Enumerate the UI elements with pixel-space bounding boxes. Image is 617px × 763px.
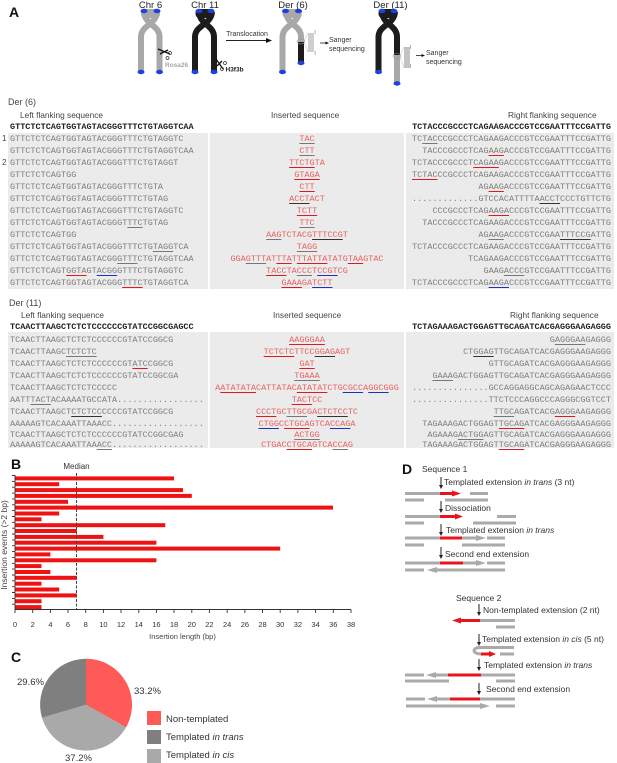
sequences: Der (6) right flanking: TCTACCCGCCCTCAGAAGACCCGTCCGAATTTCCGATTG [412, 158, 611, 168]
sequences: Der (6) inserted [230, 134, 384, 288]
column heading: inserted sequence: Inserted sequence [273, 310, 341, 320]
panel: Der (11) inserts [210, 332, 404, 448]
chromosome: Der (11) [373, 0, 411, 86]
sequences: Der (11) inserted [215, 334, 399, 450]
sequences: Der (6) left flanking: GTTCTCTCAGTGGTAGTACGGGTTTCTGTAG [10, 218, 168, 228]
chromosome: Der (6): Der (6) [278, 0, 308, 11]
sequences: Der (11) left flanking: TCAACTTAAGCTCTCTC [10, 346, 97, 356]
x axis tick labels: 36 [329, 620, 337, 629]
sequence 2 model: Second end extension [486, 684, 570, 694]
sequences: Der (11) left flanking: AAAAAGTCACAAATTAAACC.................. [10, 440, 204, 450]
sequences: Der (11) inserted: TGAAA [294, 370, 320, 380]
sequences: Der (6) right flanking: TACCCGCCCTCAGAAGACCCGTCCGAATTTCCGATTG [422, 146, 611, 156]
panel letter A: A [9, 4, 19, 20]
x axis tick labels: 22 [205, 620, 214, 629]
x axis tick labels: 8 [84, 620, 88, 629]
x axis tick labels: 16 [152, 620, 161, 629]
sequences: Der (11) right flanking: ...............GCCAGGAGGCAGCAGAGAACTCCC [412, 382, 611, 392]
sequence 1 model: Templated extension in trans (3 nt) [444, 477, 575, 487]
reference sequence: left: GTTCTCTCAGTGGTAGTACGGGTTTCTGTAGGTCAA [10, 122, 194, 132]
arrow: translocation: Translocation [226, 31, 268, 38]
sequences: Der (11) right flanking: GAGGGAAGAGGG [550, 334, 611, 344]
chromosome: Der (6): l [314, 30, 316, 36]
legend: Templated in cis [166, 750, 234, 761]
sequences: Der (6) inserted: GAAAGATCTT [281, 278, 332, 288]
heading: Der (6): Der (6) [8, 97, 36, 107]
panel B: insertion length bar chart [0, 456, 355, 641]
sequences: Der (11) left flanking: AAAAAGTCACAAATTAAACC.................. [10, 418, 204, 428]
legend [147, 711, 244, 763]
pie slices [40, 659, 132, 751]
panel letter B: B [11, 456, 21, 472]
sequence 2 model: Templated extension in cis (5 nt) [482, 634, 604, 644]
column heading: left flanking sequence: Left flanking sequence [20, 110, 103, 120]
sequence 1 model: Sequence 1 [422, 464, 468, 474]
panel: Der (6) left flanks [8, 133, 208, 289]
sequences: Der (11) right flanking: TAGAAAGACTGGAGTTGCAGATCACGAGGGAAGAGGG [422, 440, 611, 450]
sequences: Der (6) left flanking: GTTCTCTCAGTGGTAGTACGGGTTTCTGTAGGT [10, 158, 178, 168]
x axis tick labels: 26 [241, 620, 249, 629]
panel letter D: D [402, 461, 412, 477]
sequences: Der (6) left flanking [10, 134, 194, 288]
sequences: Der (6) inserted: TAGG [297, 242, 317, 252]
sequences: Der (6) right flanking: TCTACCCGCCCTCAGAAGACCCGTCCGAATTTCCGATTG [412, 170, 611, 180]
pie value labels: 33.2% [134, 686, 161, 697]
x axis tick labels: 38 [347, 620, 355, 629]
sequences: Der (6) inserted: TTCTGTA [289, 158, 325, 168]
sequences: Der (6) left flanking: GTTCTCTCAGTGGTAGTACGGGTTTCTGTAGGTC [10, 206, 183, 216]
x axis tick labels: 4 [48, 620, 52, 629]
heading: Der (11): Der (11) [9, 298, 41, 308]
sequence 2 model: Non-templated extension (2 nt) [483, 605, 600, 615]
callout: Sanger sequencing (Der 11) [416, 50, 462, 66]
x axis tick labels: 0 [13, 620, 17, 629]
sequences: Der (11) left flanking: TCAACTTAAGCTCTCTCCCCCCGTATCCGGCGA [10, 370, 178, 380]
callout: Sanger sequencing (Der 6): Sanger [329, 37, 352, 44]
sequences: Der (6) right flanking: TACCCGCCCTCAGAAGACCCGTCCGAATTTCCGATTG [422, 218, 611, 228]
x axis tick labels: 30 [276, 620, 284, 629]
pie value labels [17, 677, 161, 763]
sequence 1 model: Dissociation [445, 503, 491, 513]
column heading: inserted sequence: Inserted sequence [271, 110, 339, 120]
row number 2: 2 [2, 157, 7, 167]
sequences: Der (11) right flanking: TTGCAGATCACGAGGGAAGAGGG [494, 406, 611, 416]
chromosome: Chr 6: Chr 6 [139, 0, 162, 11]
panel A: chromosome translocation schematic [9, 0, 462, 86]
sequences: Der (6) inserted: TTC [299, 218, 315, 228]
sequences: Der (11) right flanking: ...............TTCTCCCAGGCCCAGGGCGGTCCT [412, 394, 611, 404]
x axis tick labels: 12 [117, 620, 125, 629]
chromosome: Chr 6: Rosa26 [165, 62, 189, 69]
chromosome: Chr 11 [191, 0, 244, 74]
sequences: Der (11) right flanking: TAGAAAGACTGGAGTTGCAGATCACGAGGGAAGAGGG [422, 418, 611, 428]
sequences: Der (11) inserted: TACTCC [292, 394, 322, 404]
sequences: Der (11) inserted: TCTCTCTTCCGGAGAGT [264, 346, 350, 356]
sequences: Der (6) right flanking: GAAGACCCGTCCGAATTTCCGATTG [483, 266, 611, 276]
median label: Median [63, 462, 90, 471]
panel: Der (11) left flanks [8, 332, 208, 448]
sequences: Der (11) left flanking: TCAACTTAAGCTCTCTCCCCCCGTATCCGGCG [10, 406, 173, 416]
sequences: Der (11) inserted: GAT [299, 358, 315, 368]
bars [15, 476, 333, 609]
row number 1: 1 [2, 133, 7, 143]
panel: Der (11) right flanks [406, 332, 614, 448]
chromosome: Der (11): l [410, 64, 411, 70]
sequences: Der (6) inserted: AAGTCTACGTTTCCGT [266, 230, 348, 240]
sequences: Der (6) inserted: TAC [299, 134, 315, 144]
callout: Sanger sequencing (Der 6): sequencing [329, 46, 365, 53]
x axis tick labels: 20 [188, 620, 196, 629]
sequences: Der (6) inserted: TCTT [297, 206, 317, 216]
sequences: Der (11) right flanking [412, 334, 611, 450]
sequences: Der (11) inserted: CTGACCTGCAGTCACCAG [261, 440, 353, 450]
sequences: Der (6) right flanking: TCTACCCGCCCTCAGAAGACCCGTCCGAATTTCCGATTG [412, 242, 611, 252]
chromosome: Chr 11: Chr 11 [191, 0, 219, 11]
panel: Der (6) right flanks [406, 133, 614, 289]
x axis tick labels: 28 [258, 620, 267, 629]
sequence 1 model: Templated extension in trans [446, 525, 555, 535]
sequences: Der (6) left flanking: GTTCTCTCAGTGGTAGTACGGGTTTCTGTAGGTCA [10, 242, 189, 252]
reference sequence: left: TCAACTTAAGCTCTCTCCCCCCGTATCCGGCGAGCC [10, 322, 194, 332]
chromosome: Der (6): l [314, 51, 316, 57]
sequences: Der (11) left flanking: AATTTACTACAAAATGCCATA................. [10, 394, 204, 404]
column heading: right flanking sequence: Right flanking sequence [508, 110, 597, 120]
panel D: extension models [402, 461, 604, 709]
sequence 1 model: Second end extension [445, 549, 529, 559]
sequence 2 model [405, 593, 604, 709]
sequences: Der (11) right flanking: GTTGCAGATCACGAGGGAAGAGGG [489, 358, 611, 368]
pie value labels: 29.6% [17, 677, 44, 688]
x axis tick labels: 6 [66, 620, 70, 629]
panel letter C: C [11, 649, 21, 665]
chromosome: Der (11): Der (11) [373, 0, 408, 11]
sequences: Der (6) inserted: ACCTACT [289, 194, 325, 204]
x axis tick labels: 32 [294, 620, 302, 629]
sequences: Der (6) left flanking: GTTCTCTCAGTGGTAGTACGGGTTTCTGTAGGTCAA [10, 146, 194, 156]
callout: Sanger sequencing (Der 11): Sanger [426, 50, 449, 57]
legend: Non-templated [166, 714, 228, 725]
sequences: Der (11) left flanking: TCAACTTAAGCTCTCTCCCCCCGTATCCGGCGAG [10, 430, 183, 440]
sequences: Der (6) inserted: GGAGTTTATTTATTTATTATATGTAAGTAC [230, 254, 384, 264]
sequences: Der (6) left flanking: GTTCTCTCAGTGG [10, 230, 76, 240]
chromosome: Der (6) [278, 0, 316, 74]
panel C: pie chart [11, 649, 244, 763]
sequences: Der (11) right flanking: CTGGAGTTGCAGATCACGAGGGAAGAGGG [463, 346, 611, 356]
sequences: Der (6) left flanking: GTTCTCTCAGTGGTAGTACGGGTTTCTGTAGGTCA [10, 278, 189, 288]
sequences: Der (11) inserted: AATATATACATTATACATATATCTGCGCCAGGCGGG [215, 382, 399, 392]
sequences: Der (11) inserted: AAGGGAA [289, 334, 325, 344]
chromosome: Der (11): l [410, 45, 411, 51]
axes [12, 475, 351, 613]
sequences: Der (6) right flanking: TCAGAAGACCCGTCCGAATTTCCGATTG [468, 254, 611, 264]
sequences: Der (6) right flanking: TCTACCCGCCCTCAGAAGACCCGTCCGAATTTCCGATTG [412, 278, 611, 288]
sequences: Der (11) inserted: CTGGCCTGCAGTCACCAGA [259, 418, 355, 428]
sequences: Der (11) left flanking [10, 334, 204, 450]
x axis tick labels: 24 [223, 620, 231, 629]
x axis tick labels: 34 [311, 620, 320, 629]
sequence 1 model [405, 464, 575, 573]
x axis tick labels: 2 [31, 620, 35, 629]
sequences: Der (6) left flanking: GTTCTCTCAGTGGTAGTACGGGTTTCTGTAGGTC [10, 134, 183, 144]
sequence 2 model: Sequence 2 [456, 593, 502, 603]
sequences: Der (6) left flanking: GTTCTCTCAGTGGTAGTACGGGTTTCTGTAGGTC [10, 266, 183, 276]
chromosome: Chr 11: H3f3b [226, 66, 244, 74]
x axis title: Insertion length (bp) [149, 632, 216, 641]
reference sequence: right: TCTAGAAAGACTGGAGTTGCAGATCACGAGGGAAGAGGG [412, 322, 611, 332]
sequences: Der (6) right flanking: .............GTCCACATTTTAACCTCCCTGTTCTG [412, 194, 611, 204]
sequences: Der (11) left flanking: TCAACTTAAGCTCTCTCCCCC [10, 382, 117, 392]
column heading: right flanking sequence: Right flanking sequence [510, 310, 599, 320]
reference sequence: right: TCTACCCGCCCTCAGAAGACCCGTCCGAATTTCCGATTG [412, 122, 611, 132]
x axis tick labels [13, 620, 355, 629]
sequences: Der (6) left flanking: GTTCTCTCAGTGGTAGTACGGGTTTCTGTA [10, 182, 163, 192]
sequences: Der (11) inserted: CCCTGCTTGCGACTCTCCTC [256, 406, 358, 416]
sequences: Der (6) right flanking: TCTACCCGCCCTCAGAAGACCCGTCCGAATTTCCGATTG [412, 134, 611, 144]
sequences: Der (11) left flanking: TCAACTTAAGCTCTCTCCCCCCGTATCCGGCG [10, 358, 173, 368]
median line [76, 473, 78, 609]
sequences: Der (6) right flanking [412, 134, 611, 288]
arrow: translocation [226, 31, 272, 43]
sequences: Der (11) right flanking: AGAAAGACTGGAGTTGCAGATCACGAGGGAAGAGGG [427, 430, 611, 440]
x axis tick labels: 10 [99, 620, 108, 629]
sequence 2 model: Templated extension in trans [484, 660, 593, 670]
sequences: Der (6) left flanking: GTTCTCTCAGTGG [10, 170, 76, 180]
callout: Sanger sequencing (Der 11): sequencing [426, 59, 462, 66]
column heading: left flanking sequence: Left flanking sequence [21, 310, 104, 320]
panel: Der (6) inserts [210, 133, 404, 289]
legend: Templated in trans [166, 732, 244, 743]
sequences: Der (6) right flanking: AGAAGACCCGTCCGAATTTCCGATTG [478, 230, 611, 240]
sequences: Der (6) inserted: TACCTACCCTCCGTCG [266, 266, 348, 276]
sequences: Der (11) left flanking: TCAACTTAAGCTCTCTCCCCCCGTATCCGGCG [10, 334, 173, 344]
sequences: Der (6) inserted: CTT [299, 182, 315, 192]
sequences: Der (6) left flanking: GTTCTCTCAGTGGTAGTACGGGTTTCTGTAG [10, 194, 168, 204]
sequences: Der (11) right flanking: GAAAGACTGGAGTTGCAGATCACGAGGGAAGAGGG [432, 370, 611, 380]
x axis tick labels: 14 [135, 620, 143, 629]
sequences: Der (11) inserted: ACTGG [294, 430, 320, 440]
sequences: Der (6) right flanking: CCCGCCCTCAGAAGACCCGTCCGAATTTCCGATTG [432, 206, 611, 216]
sequences: Der (6) inserted: CTT [299, 146, 315, 156]
x axis tick labels: 18 [170, 620, 178, 629]
sequences: Der (6) inserted: GTAGA [294, 170, 320, 180]
sequences: Der (6) right flanking: AGAAGACCCGTCCGAATTTCCGATTG [478, 182, 611, 192]
chromosome: Chr 6 [138, 0, 189, 74]
callout: Sanger sequencing (Der 6) [320, 37, 365, 53]
sequences: Der (6) left flanking: GTTCTCTCAGTGGTAGTACGGGTTTCTGTAGGTCAA [10, 254, 194, 264]
